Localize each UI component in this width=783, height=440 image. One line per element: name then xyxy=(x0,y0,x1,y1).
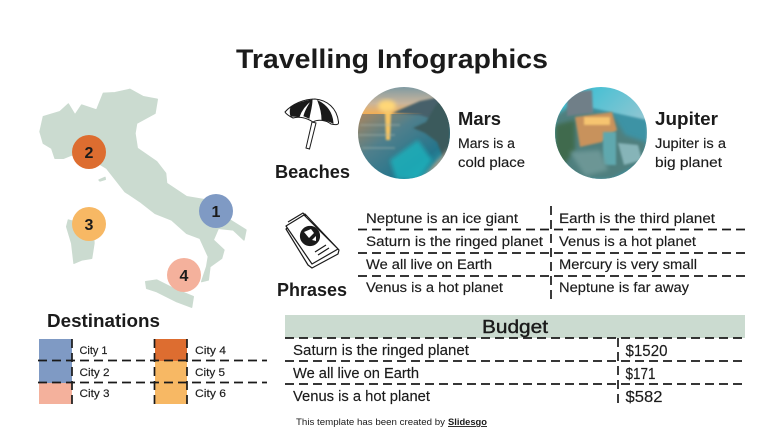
legend grid lines xyxy=(38,339,267,404)
legend labels: City 2 xyxy=(80,367,110,379)
marker 1 xyxy=(199,194,233,228)
icon: beach umbrella xyxy=(285,99,339,149)
marker 4: 4 xyxy=(180,268,189,285)
destinations legend xyxy=(38,310,267,404)
Mars text: cold place xyxy=(458,155,525,170)
legend swatches xyxy=(39,339,187,404)
marker 3 xyxy=(72,207,106,241)
budget items: Saturn is the ringed planet xyxy=(293,343,469,359)
destinations heading: Destinations xyxy=(47,310,160,331)
marker 2 xyxy=(72,135,106,169)
Jupiter heading: Jupiter xyxy=(655,108,718,129)
budget grid lines xyxy=(285,338,746,405)
phrases left column xyxy=(366,211,543,295)
Jupiter text: big planet xyxy=(655,155,722,170)
phrases right column: Venus is a hot planet xyxy=(559,234,696,249)
budget values: $1520 xyxy=(626,343,668,360)
marker 3: 3 xyxy=(85,217,94,234)
budget table xyxy=(285,315,746,406)
Jupiter text: Jupiter is a xyxy=(655,136,727,151)
phrases right column xyxy=(559,211,715,295)
beaches label: Beaches xyxy=(275,161,350,182)
phrases right column: Earth is the third planet xyxy=(559,211,715,226)
legend labels: City 3 xyxy=(80,388,110,400)
budget items xyxy=(293,343,469,405)
marker 1: 1 xyxy=(212,204,221,221)
budget values: $582 xyxy=(626,389,663,406)
legend labels xyxy=(80,345,226,400)
legend labels: City 5 xyxy=(195,367,225,379)
footer credit: Slidesgo xyxy=(448,417,488,427)
title: Travelling Infographics xyxy=(236,44,548,74)
phrases left column: We all live on Earth xyxy=(366,257,492,272)
Mars text: Mars is a xyxy=(458,136,516,151)
phrases section xyxy=(277,206,746,300)
photo: sunset coast xyxy=(358,87,450,179)
budget values xyxy=(626,343,668,406)
map shapes xyxy=(40,89,246,307)
legend labels: City 4 xyxy=(195,345,226,357)
phrases right column: Neptune is far away xyxy=(559,280,689,295)
legend labels: City 1 xyxy=(80,345,108,357)
footer credit: This template has been created by xyxy=(296,417,446,427)
beaches section xyxy=(275,87,727,182)
phrases grid lines xyxy=(358,206,746,300)
legend labels: City 6 xyxy=(195,388,226,400)
budget header xyxy=(285,315,745,338)
budget values: $171 xyxy=(626,366,656,383)
phrases left column: Venus is a hot planet xyxy=(366,280,503,295)
budget items: Venus is a hot planet xyxy=(293,389,430,405)
photo: cliff castle xyxy=(555,87,647,179)
marker 4 xyxy=(167,258,201,292)
budget header: Budget xyxy=(482,317,548,337)
phrases right column: Mercury is very small xyxy=(559,257,697,272)
Jupiter text xyxy=(655,136,727,170)
icon: passport xyxy=(286,213,339,268)
map of Italy with markers xyxy=(40,89,246,307)
phrases label: Phrases xyxy=(277,279,347,300)
phrases left column: Neptune is an ice giant xyxy=(366,211,518,226)
Mars text xyxy=(458,136,525,170)
Mars heading: Mars xyxy=(458,108,501,129)
phrases left column: Saturn is the ringed planet xyxy=(366,234,543,249)
budget items: We all live on Earth xyxy=(293,366,419,382)
phrases table xyxy=(358,206,746,300)
marker 2: 2 xyxy=(85,145,94,162)
